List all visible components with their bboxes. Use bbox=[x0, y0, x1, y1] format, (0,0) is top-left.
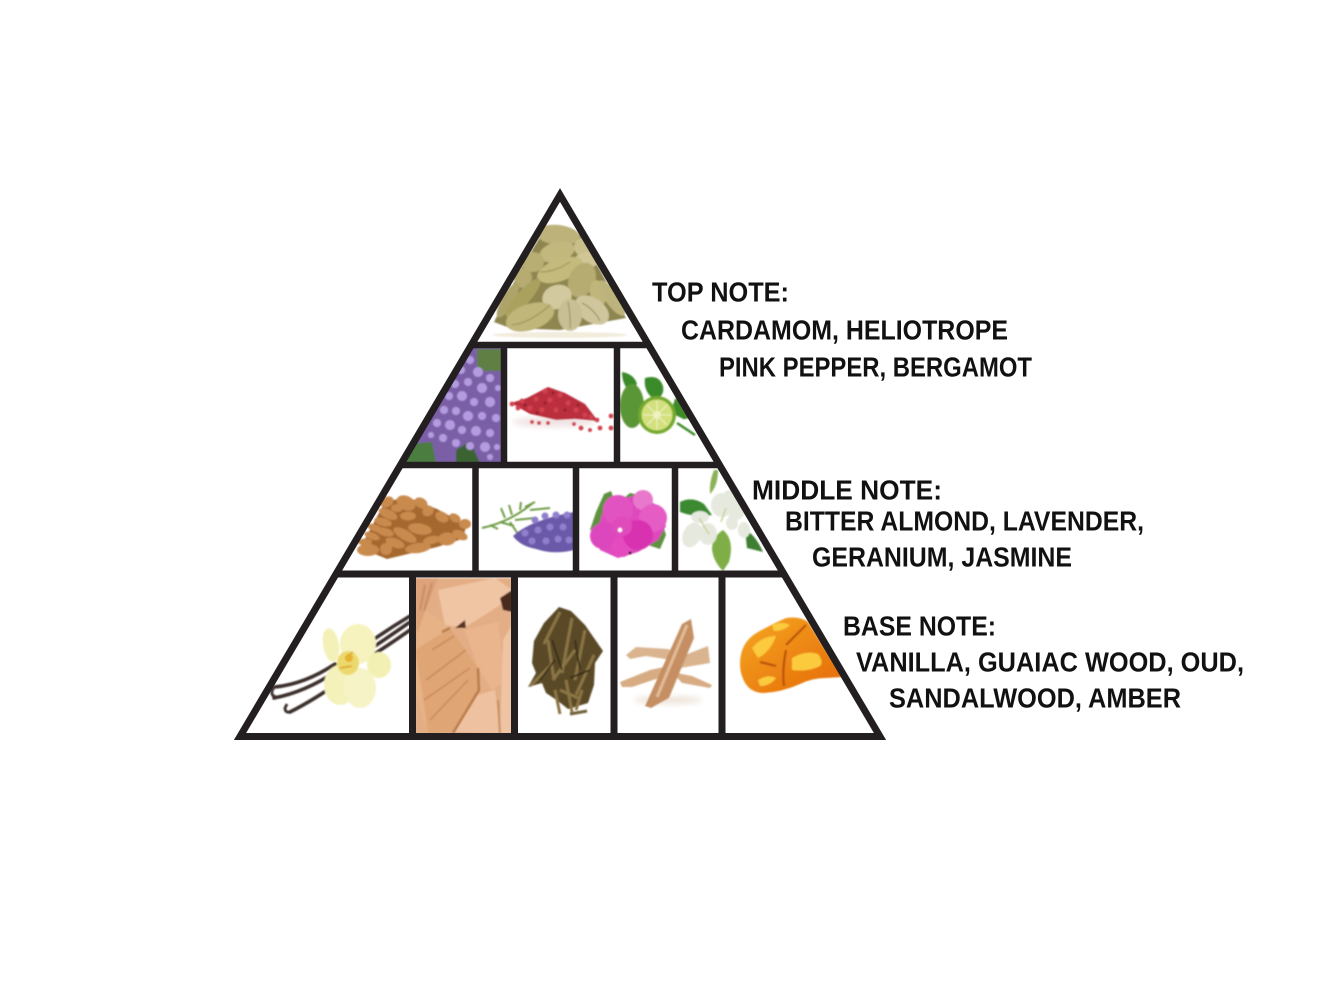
label: base note: VANILLA, GUAIAC WOOD, OUD, bbox=[856, 646, 1244, 678]
label: top note: TOP NOTE: bbox=[652, 276, 789, 308]
label: base note: BASE NOTE: bbox=[843, 610, 996, 642]
photo: guaiac wood bbox=[415, 578, 512, 734]
label: top note: CARDAMOM, HELIOTROPE bbox=[681, 314, 1008, 346]
fragrance pyramid bbox=[240, 195, 880, 736]
photo: geranium bbox=[590, 490, 667, 558]
photo: pink pepper bbox=[510, 387, 613, 432]
photos clipped to the pyramid bbox=[272, 223, 842, 734]
label: top note bbox=[652, 276, 1032, 382]
photo: bergamot bbox=[620, 372, 695, 435]
label: middle note bbox=[752, 474, 1144, 572]
photo: amber bbox=[740, 618, 842, 693]
photo: sandalwood bbox=[620, 619, 712, 708]
label: base note: SANDALWOOD, AMBER bbox=[889, 682, 1181, 714]
photo: bitter almonds bbox=[357, 492, 471, 559]
label: middle note: BITTER ALMOND, LAVENDER, bbox=[785, 506, 1144, 536]
label: top note: PINK PEPPER, BERGAMOT bbox=[719, 352, 1032, 382]
label: middle note: MIDDLE NOTE: bbox=[752, 474, 942, 506]
label: base note bbox=[843, 610, 1244, 714]
photo: heliotrope bbox=[400, 347, 502, 463]
photo: lavender bbox=[482, 502, 574, 552]
photo: vanilla bbox=[272, 616, 410, 712]
label: middle note: GERANIUM, JASMINE bbox=[812, 542, 1072, 572]
photo: oud bbox=[528, 607, 603, 714]
photo: jasmine bbox=[678, 470, 763, 571]
photo: cardamom pods bbox=[492, 223, 630, 338]
pyramid outline and dividers bbox=[240, 195, 880, 736]
